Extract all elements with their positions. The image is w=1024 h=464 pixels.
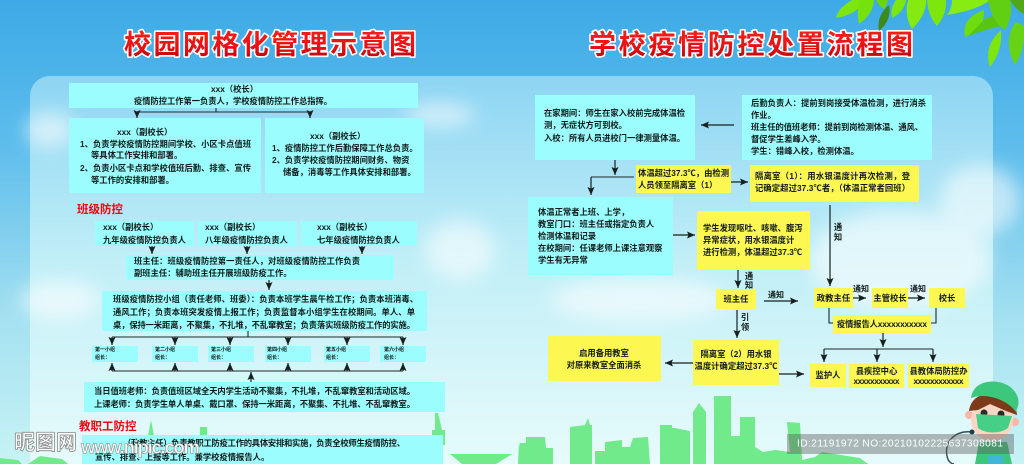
box: county CDC [849, 364, 904, 388]
watermark left: 昵图网 [14, 432, 77, 454]
grade 7 box: 七年级疫情防控负责人 [317, 235, 401, 245]
grade 9 box: xxx（副校长） [103, 222, 158, 232]
box: symptoms: 学生发现呕吐、咳嗽、腹泻 [703, 223, 803, 233]
box: normal temperature [528, 197, 673, 275]
class teacher box: 副班主任：辅助班主任开展班级防疫工作。 [134, 268, 292, 278]
class team box: 桌，保持一米距离，不聚集，不扎堆，不乱窜教室；负责落实班级防疫工作的实施。 [113, 320, 415, 330]
box: logistics [742, 95, 932, 160]
staff box [82, 435, 443, 464]
box: epidemic reporter: 疫情报告人xxxxxxxxxxx [837, 319, 927, 329]
group boxes: 组长： [326, 354, 341, 361]
arrows: team to groups [112, 331, 403, 345]
box: at home [535, 95, 695, 160]
box: logistics: 班主任的值班老师：提前到岗检测体温、通风、 [751, 122, 923, 132]
grade 8 box: xxx（副校长） [205, 222, 260, 232]
grade 9 box: 九年级疫情防控负责人 [103, 235, 187, 245]
staff box: 宣传、排查、上报等工作。兼学校疫情报告人。 [95, 452, 269, 462]
box: isolation room 1: 记确定超过37.3℃者，（体温正常者回班） [755, 183, 910, 193]
box: temperature over limit: 体温超过37.3℃，由检测 [638, 168, 729, 178]
content panel [30, 76, 993, 464]
arrows: duty teachers to groups [112, 363, 403, 382]
arrow: isolation 1 notify dean [830, 205, 843, 286]
vice principal box left [69, 118, 261, 193]
watermark left: www.nipic.com [80, 436, 200, 458]
group boxes: 第二小组 [155, 346, 175, 353]
heading: epidemic handling flow: 学校疫情防控处置流程图 [589, 30, 913, 60]
grade 8 box: 八年级疫情防控负责人 [205, 235, 289, 245]
watermark right: ID:21191972 NO:20210102225637308081 [797, 438, 1003, 450]
vice principal box right: xxx（副校长） [310, 131, 365, 141]
arrow: normal to symptoms [673, 234, 695, 236]
box: symptoms: 进行检测，体温超过37.3℃ [703, 247, 803, 257]
box: spare classroom [548, 336, 661, 381]
arrows: reporter to recipients [824, 333, 933, 362]
box: dean [814, 288, 853, 308]
box: supervising vice principal [872, 288, 908, 308]
arrow: dean to vice principal [853, 284, 869, 298]
duty teacher box: 当日值班老师：负责值班区域全天内学生活动不聚集，不扎堆，不乱窜教室和活动区域。 [94, 386, 415, 396]
arrow: lead to isolation room 2: 引 [741, 312, 749, 322]
group boxes: 组长： [211, 354, 226, 361]
box: class teacher: 班主任 [724, 294, 748, 304]
duty teacher box [84, 382, 445, 412]
box: class teacher [716, 289, 756, 309]
arrow: principal to vice principals [137, 108, 310, 118]
doctor character [965, 381, 1019, 464]
box: normal temperature: 检测体温和记录 [538, 231, 596, 241]
watermark left [14, 432, 200, 458]
box: isolation room 2: 温度计确定超过37.3℃ [694, 361, 778, 371]
grade 7 box [301, 221, 417, 246]
group boxes: 组长： [155, 354, 170, 361]
box: isolation room 2 [693, 340, 779, 385]
arrow: notify class teacher [738, 270, 754, 290]
vice principal box right: 储备，消毒等工作具体安排和部署。 [283, 167, 416, 177]
group boxes: 组长： [95, 354, 110, 361]
box: temperature over limit: 人员领至隔离室（1） [638, 180, 717, 190]
box: principal [929, 288, 965, 308]
box: spare classroom: 对原来教室全面消杀 [567, 360, 641, 370]
group boxes: 第四小组 [267, 346, 287, 353]
arrow: notify dean: 通知 [768, 290, 784, 300]
principal box [69, 83, 418, 108]
vice principal box right [265, 118, 424, 193]
box: county education bureau: xxxxxxxxxxxx [914, 376, 964, 386]
principal box: 疫情防控工作第一负责人，学校疫情防控工作总指挥。 [134, 96, 332, 106]
section heading: staff: 教职工防控 [79, 419, 137, 433]
group boxes: 组长： [384, 354, 399, 361]
vice principal box left: 等具体工作安排和部署。 [91, 150, 182, 160]
box: county education bureau: 县教体局防控办 [910, 366, 968, 376]
box: at home: 在家期间：师生在家入校前完成体温检 [544, 108, 686, 118]
city skyline [0, 396, 868, 464]
box: county CDC: 县疾控中心 [856, 366, 898, 376]
arrow: to spare classroom [665, 362, 693, 364]
box: logistics: 后勤负责人：提前到岗接受体温检测，进行消杀 [751, 98, 926, 108]
heading: campus grid management: 校园网格化管理示意图 [124, 30, 416, 60]
arrows: grades to class teacher [152, 246, 362, 290]
arrow: isolation 1 notify dean: 知 [834, 232, 842, 242]
group boxes: 第一小组 [95, 346, 115, 353]
arrow: logistics to home [701, 124, 734, 126]
class team box: 通风工作；负责本班突发疫情上报工作；负责监督本小组学生在校期间。单人、单 [113, 307, 415, 317]
arrow: vice principal to principal: 通知 [910, 284, 926, 294]
box: county CDC: xxxxxxxxxxx [854, 376, 900, 386]
box: guardian: 监护人 [816, 370, 841, 380]
arrow: notify class teacher: 知 [745, 280, 753, 290]
class teacher box: 班主任：班级疫情防控第一责任人，对班级疫情防控工作负责 [134, 256, 360, 266]
box: isolation room 1: 隔离室（1）：用水银温度计再次检测，登 [755, 171, 911, 181]
group boxes: 第五小组 [326, 346, 346, 353]
arrow: lead to isolation room 2: 领 [741, 322, 750, 332]
duty teacher box: 上课老师：负责学生单人单桌、戴口罩、保持一米距离，不聚集、不扎堆、不乱窜教室。 [94, 399, 415, 409]
box: logistics: 学生：错峰入校，检测体温。 [751, 146, 859, 156]
vice principal box left: xxx（副校长） [117, 127, 172, 137]
class team box [102, 291, 427, 331]
box: isolation room 2: 隔离室（2）用水银 [700, 349, 772, 359]
box: county education bureau [908, 364, 969, 388]
box: temperature over limit [636, 165, 731, 193]
arrow: to guardian [779, 373, 804, 375]
section heading: class: 班级防控 [77, 202, 123, 216]
box: normal temperature: 体温正常者上班、上学， [538, 207, 629, 217]
staff box: （政教主任）负责教职工防疫工作的具体安排和实施，负责全校师生疫情防控、 [123, 438, 405, 448]
arrows: home to normal [591, 160, 634, 195]
grade 7 box: xxx（副校长） [317, 222, 372, 232]
box: symptoms: 异常症状，用水银温度计 [703, 235, 795, 245]
box: isolation room 1 [750, 165, 919, 202]
arrow: notify class teacher: 通 [745, 271, 754, 281]
box: logistics: 作业。 [751, 110, 776, 120]
watermark right [787, 434, 1014, 454]
arrow: notify dean [764, 290, 798, 301]
grade 9 box [95, 221, 194, 246]
vice principal box left: 等工作的安排和部署。 [91, 175, 174, 185]
brackets to reporter [829, 308, 936, 323]
group boxes: 第三小组 [211, 346, 231, 353]
box: normal temperature: 教室门口：班主任或指定负责人 [538, 219, 655, 229]
vice principal box left: 1、负责学校疫情防控期间学校、小区卡点值班 [80, 139, 252, 149]
class team box: 班级疫情防控小组（责任老师、班委）：负责本班学生晨午检工作；负责本班消毒、 [113, 294, 418, 304]
group boxes: 第六小组 [384, 346, 404, 353]
arrow: dean to vice principal: 通知 [853, 284, 869, 294]
leaves decoration [836, 0, 1024, 67]
box: symptoms [697, 211, 810, 270]
box: at home: 入校：所有人员进校门一律测量体温。 [544, 133, 685, 143]
box: logistics: 督促学生差峰入学。 [751, 134, 826, 144]
box: guardian [810, 364, 846, 387]
clouds [20, 103, 1020, 322]
box: spare classroom: 启用备用教室 [579, 348, 629, 358]
arrow: vice principal to principal [908, 284, 926, 298]
box: epidemic reporter [833, 315, 931, 333]
grade 8 box [198, 221, 297, 246]
icon: stethoscope [947, 432, 972, 464]
arrow: to isolation room 1 [731, 181, 748, 183]
vice principal box right: 1、疫情防控工作后勤保障工作总负责。 [272, 143, 418, 153]
vice principal box left: 2、负责小区卡点和学校值班后勤、排查、宣传 [80, 163, 251, 173]
box: supervising vice principal: 主管校长 [873, 293, 907, 303]
box: normal temperature: 在校期间：任课老师上课注意观察 [538, 243, 663, 253]
box: normal temperature: 学生有无异常 [538, 255, 588, 265]
box: dean: 政教主任 [817, 293, 851, 303]
group boxes: 组长： [267, 354, 282, 361]
principal box: xxx（校长） [211, 84, 258, 94]
class teacher box [126, 255, 394, 280]
vice principal box right: 2、负责学校疫情防控期间财务、物资 [272, 155, 409, 165]
arrow: isolation 1 notify dean: 通 [834, 222, 843, 232]
arrow: lead to isolation room 2 [737, 310, 750, 338]
box: at home: 测，无症状方可到校。 [544, 120, 627, 130]
group boxes [92, 346, 426, 362]
box: principal: 校长 [939, 293, 956, 303]
